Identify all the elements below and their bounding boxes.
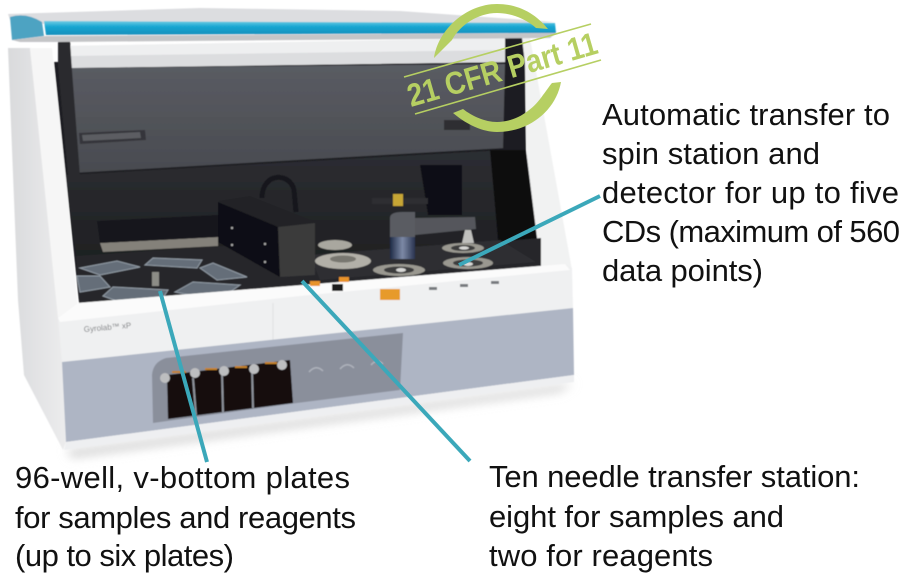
- tube loop: [262, 177, 296, 212]
- orange indicator large: [380, 289, 400, 300]
- callout: plates: [15, 460, 356, 573]
- vent marks: [309, 361, 383, 372]
- seam: [272, 303, 274, 343]
- CD discs: [315, 240, 493, 276]
- deck floor: [76, 238, 541, 306]
- callout: needle station: [489, 459, 860, 573]
- brand label: Gyrolab™ xP: [83, 321, 132, 334]
- white bottom strip: [64, 375, 574, 450]
- stamp text: 21 CFR Part 11: [403, 25, 601, 114]
- robot arm: [390, 212, 476, 259]
- right side panel: [520, 38, 572, 270]
- grey upper panel: [70, 64, 505, 173]
- pump window: [167, 360, 293, 419]
- interior dark cavity: [54, 55, 541, 312]
- callout: needle station: two for reagents: [489, 538, 713, 573]
- callout: spin station: data points): [602, 253, 763, 288]
- lid blue stripe: [44, 21, 556, 35]
- leader line: spin station: [459, 196, 600, 265]
- lower-right deck: [310, 240, 536, 280]
- orange indicators small: [310, 277, 349, 286]
- body white pillar: [30, 48, 78, 318]
- black button: [332, 284, 343, 291]
- instrument photo: [8, 8, 574, 458]
- lid teal end: [10, 15, 44, 40]
- pump separators: [193, 368, 253, 415]
- status LEDs: [429, 281, 499, 290]
- yellow clamp: [393, 194, 403, 206]
- stamp rules: [404, 24, 591, 77]
- callout: spin station: CDs (maximum of 560: [602, 214, 900, 249]
- callout: needle station: eight for samples and: [489, 499, 784, 534]
- callout: plates: 96-well, v-bottom plates: [15, 460, 350, 495]
- detector block: [420, 165, 462, 215]
- centre plate post: [152, 272, 159, 286]
- lid top surface: [8, 8, 555, 24]
- right interior shadow: [490, 150, 540, 262]
- pump heads: [160, 360, 287, 383]
- callout: plates: (up to six plates): [15, 538, 234, 573]
- stamp bottom arc: [453, 82, 561, 132]
- callout: spin station: [602, 97, 900, 288]
- callout: spin station: Automatic transfer to: [602, 97, 890, 132]
- callout: spin station: detector for up to five: [602, 175, 899, 210]
- right lid strut: [503, 38, 526, 150]
- orange tube tips: [172, 362, 277, 373]
- front white band: [58, 264, 573, 362]
- callout: needle station: Ten needle transfer station:: [489, 459, 860, 494]
- under-lid white strip: [58, 38, 512, 68]
- callout: spin station: spin station and: [602, 136, 820, 171]
- stamp top arc: [434, 4, 548, 58]
- panel handle right: [444, 120, 470, 130]
- left lid strut: [58, 40, 80, 176]
- vent grille: [152, 333, 403, 423]
- callout: plates: for samples and reagents: [15, 500, 356, 535]
- plates: [77, 258, 247, 301]
- needle head black box: [218, 196, 315, 277]
- lid underside: [12, 33, 556, 42]
- floor shadow: [66, 383, 574, 458]
- body left side panel: [8, 48, 66, 450]
- leader line: needle station: [302, 281, 470, 461]
- grey lower front: [62, 308, 574, 442]
- leader line: plates: [160, 291, 207, 462]
- stamp: 21 CFR Part 11: [403, 4, 601, 132]
- panel handle left: [79, 130, 146, 144]
- interior back wall: [66, 150, 535, 270]
- detector rod: [372, 198, 428, 204]
- dark horizontal rail: [100, 237, 218, 252]
